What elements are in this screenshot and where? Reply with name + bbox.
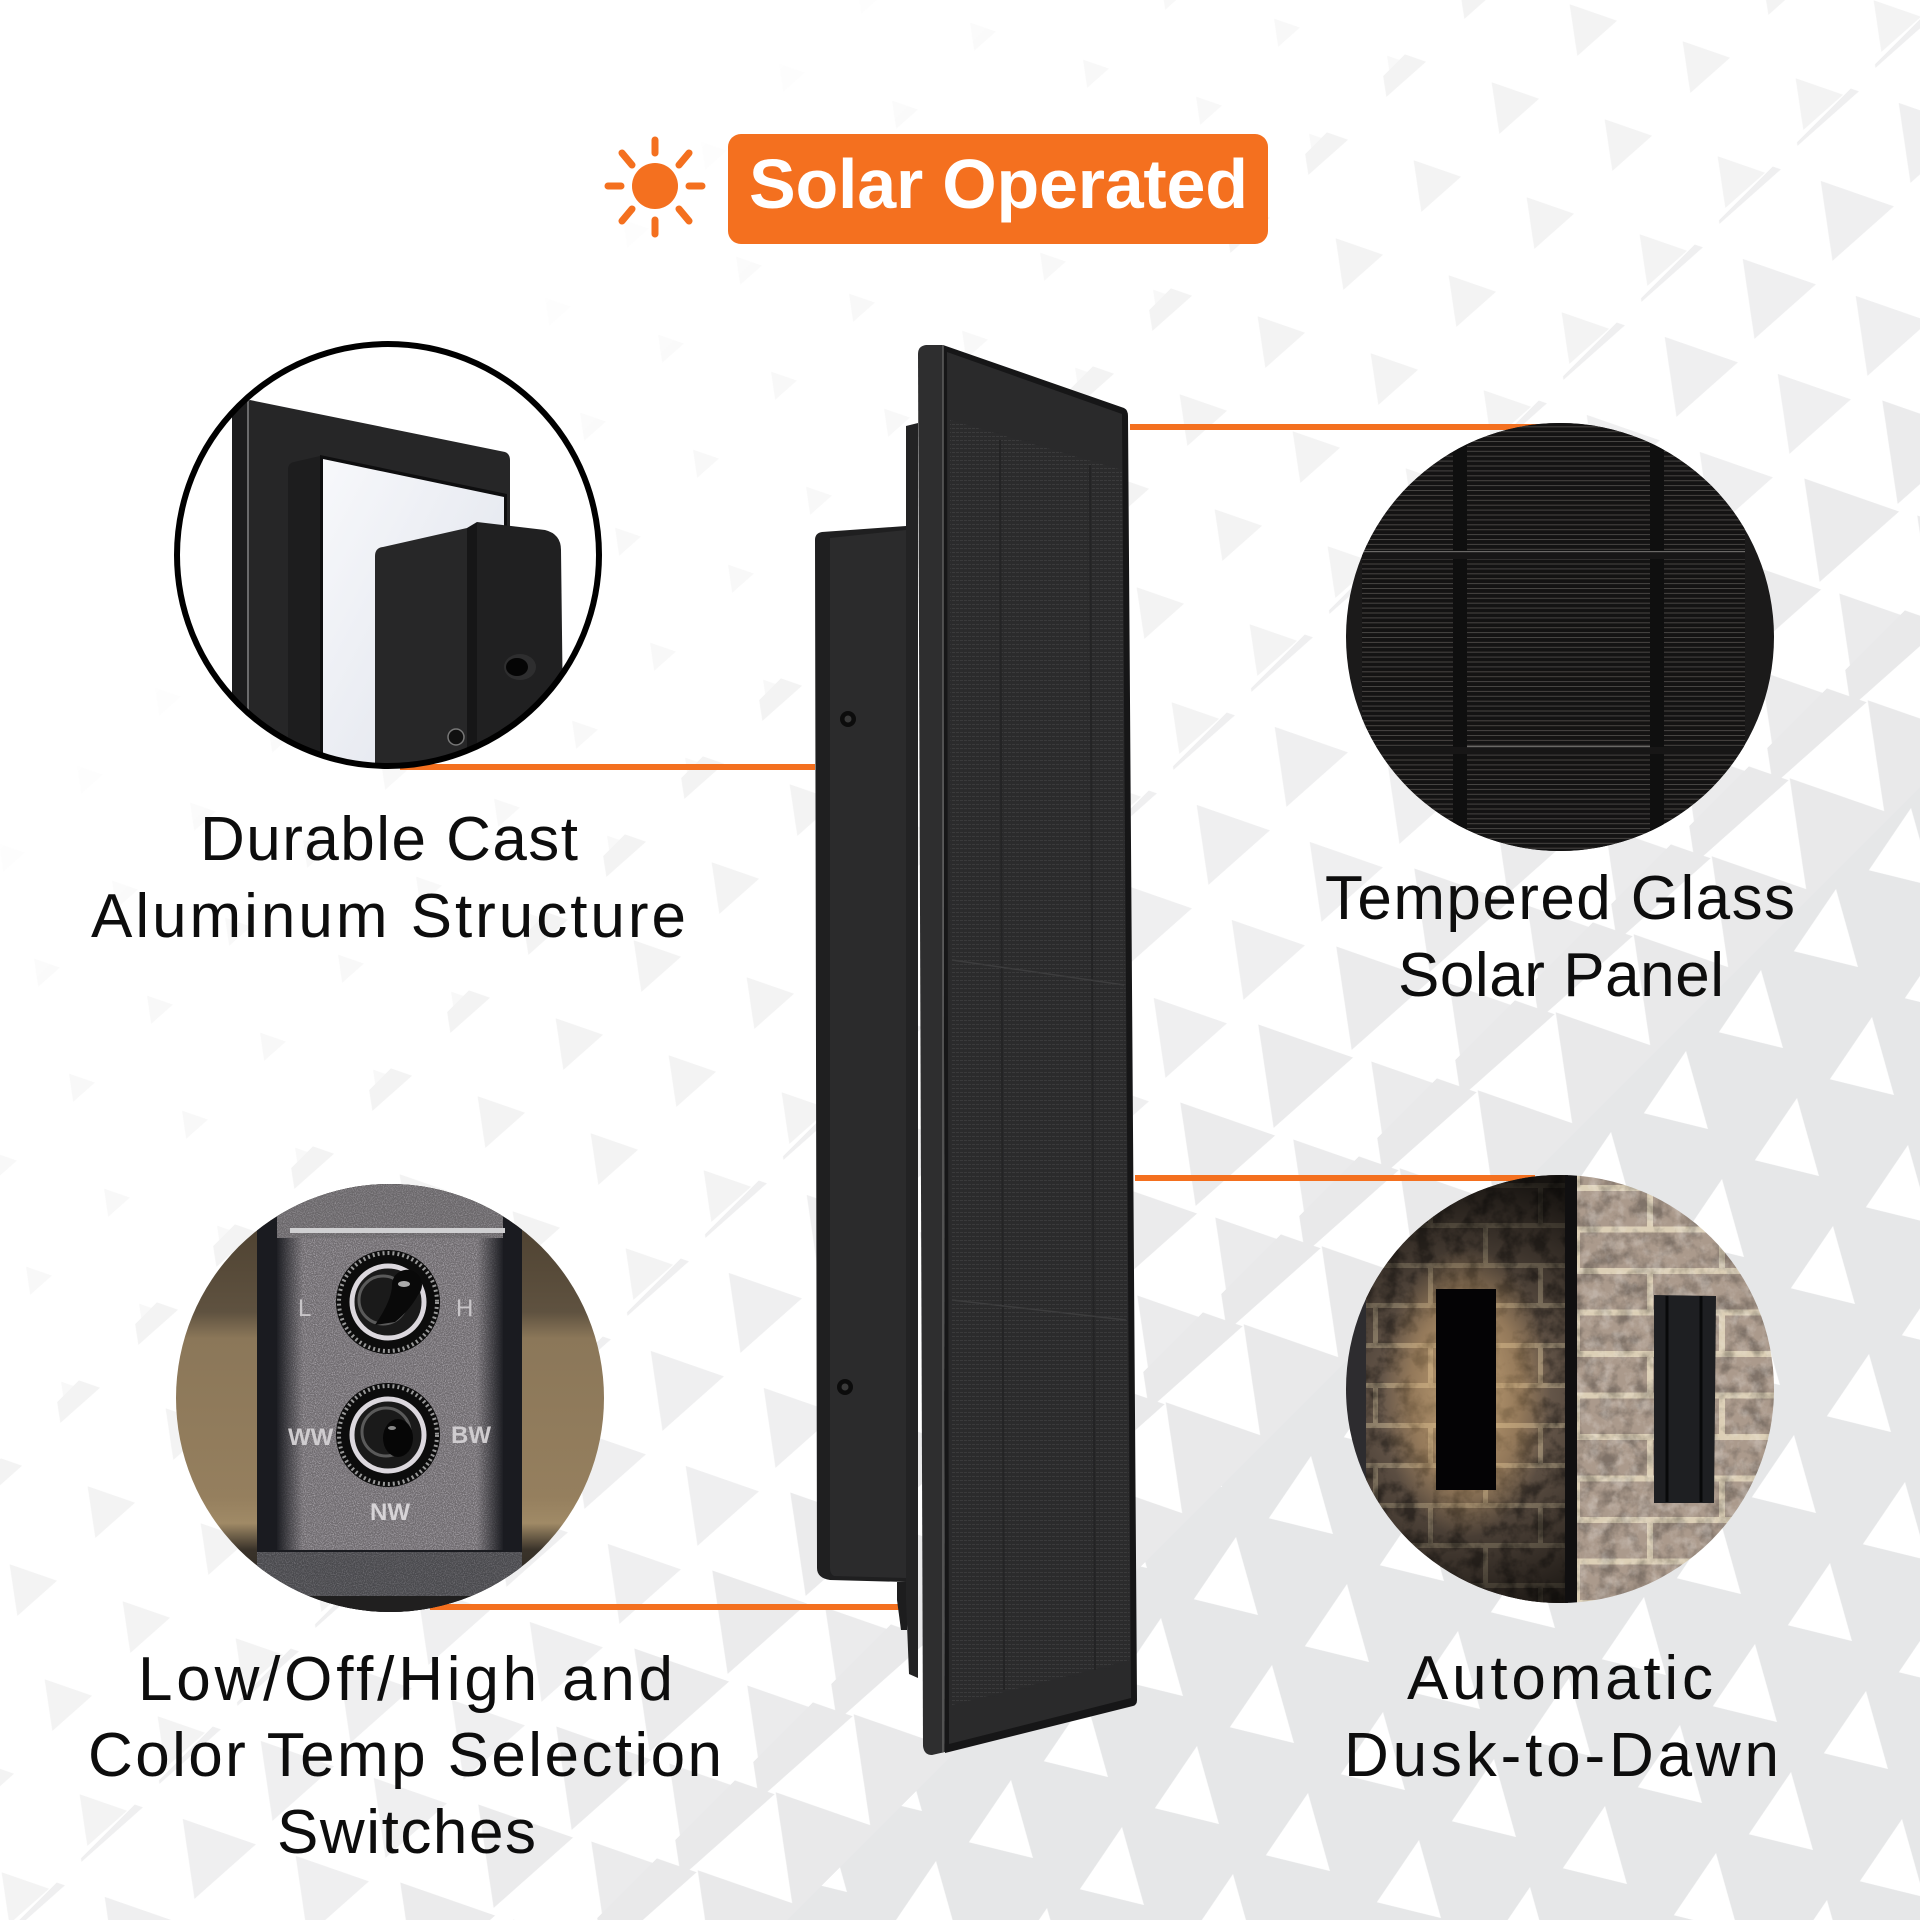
photo circle: cast aluminum detail [176, 343, 600, 800]
caption: switches: Switches [277, 1798, 536, 1867]
caption: switches: Low/Off/High and [138, 1645, 673, 1714]
caption: dusk-to-dawn [1344, 1644, 1779, 1790]
caption: solar panel [1325, 864, 1795, 1010]
caption: switches [88, 1645, 722, 1867]
mounting bracket [906, 423, 918, 1678]
caption: switches: Color Temp Selection [88, 1721, 722, 1790]
panel face with cells [943, 345, 1137, 1753]
back housing [815, 526, 907, 1630]
caption: dusk-to-dawn: Automatic [1407, 1644, 1713, 1713]
connector line: dusk-to-dawn [1135, 1175, 1535, 1181]
switch: low/high toggle [336, 1250, 440, 1354]
caption: dusk-to-dawn: Dusk-to-Dawn [1344, 1721, 1779, 1790]
photo circle: switches close-up: WW [288, 1424, 334, 1451]
connector line: switches [430, 1604, 899, 1610]
connector line: solar panel [1130, 424, 1550, 430]
connector line: cast aluminum [400, 764, 815, 770]
photo circle: switches close-up [170, 1180, 610, 1620]
title badge: Solar Operated: Solar Operated [749, 145, 1248, 223]
panel side edge [918, 345, 945, 1755]
photo circle: dusk and day comparison [1340, 1170, 1777, 1610]
photo circle: switches close-up: NW [370, 1499, 410, 1526]
caption: solar panel: Tempered Glass [1325, 864, 1795, 933]
screw: lower [837, 1379, 853, 1395]
icon: sun [608, 140, 702, 234]
day half: daylight wall [1577, 1170, 1777, 1610]
photo circle: switches close-up: BW [451, 1422, 491, 1449]
caption: cast aluminum [91, 805, 686, 951]
screw: upper [840, 711, 856, 727]
product: solar wall light side view [815, 345, 1137, 1755]
title badge: Solar Operated [728, 134, 1268, 244]
caption: cast aluminum: Durable Cast [200, 805, 578, 874]
caption: cast aluminum: Aluminum Structure [91, 882, 686, 951]
switch: color temperature toggle [336, 1383, 440, 1487]
photo circle: switches close-up: L [298, 1295, 311, 1322]
photo circle: switches close-up: H [456, 1295, 473, 1322]
night half: lit wall [1340, 1170, 1568, 1610]
photo circle: solar panel close-up [1340, 420, 1780, 860]
caption: solar panel: Solar Panel [1398, 941, 1724, 1010]
